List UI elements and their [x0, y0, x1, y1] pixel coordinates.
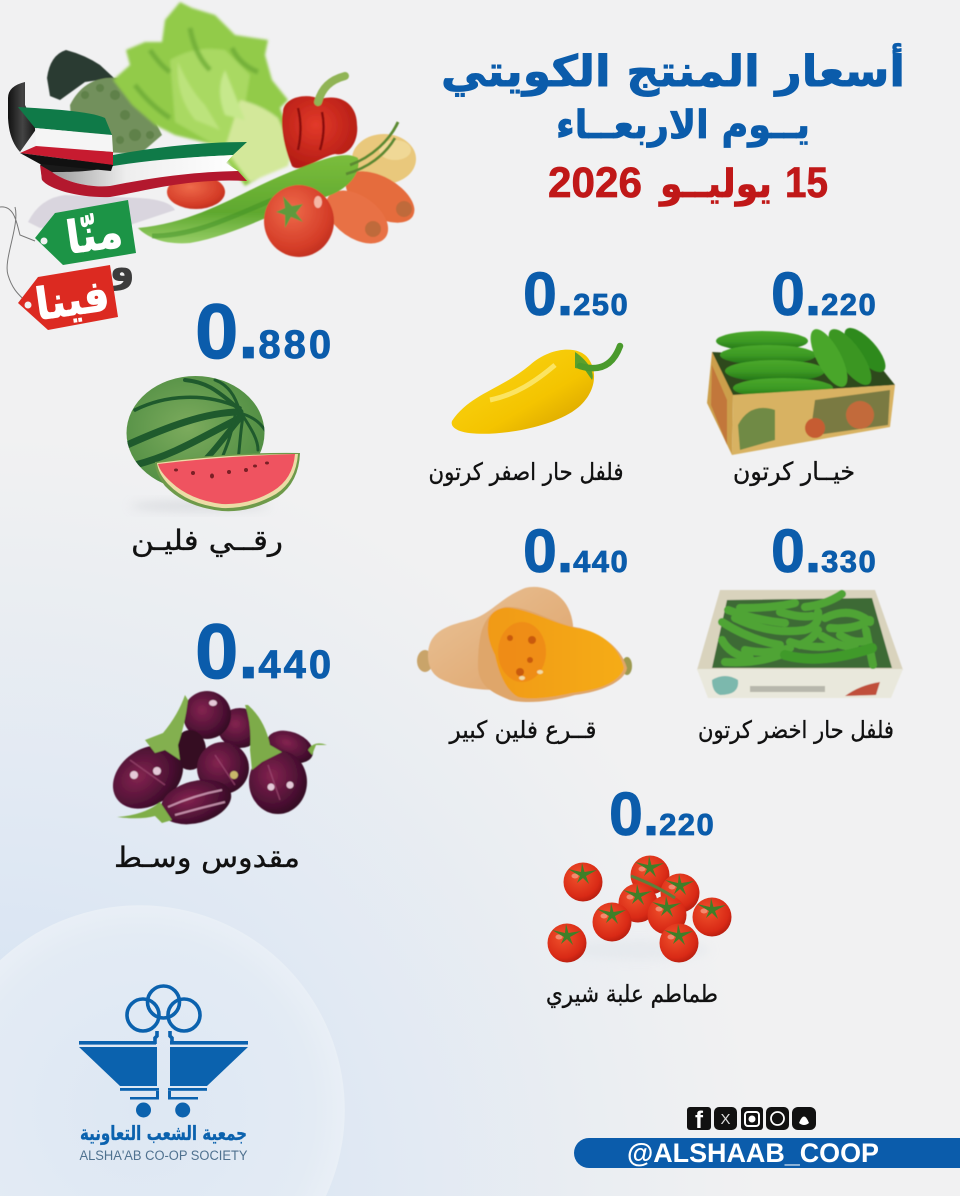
- icon: yellow pepper: [452, 346, 620, 434]
- connector: wa: و: [107, 242, 135, 292]
- long ribbon: [40, 142, 247, 197]
- icon: broccoli: [47, 50, 162, 154]
- icon: carrots: [316, 161, 423, 254]
- date: 15: [785, 159, 828, 207]
- icon: lettuce: [113, 2, 292, 186]
- logo english name: ALSHA'AB CO-OP SOCIETY: [80, 1148, 248, 1163]
- item: yellow hot pepper: [428, 260, 629, 486]
- price: 0.880: [195, 287, 334, 375]
- item: cherry tomatoes: [546, 780, 732, 1008]
- icon: white vegetable behind tags: [28, 195, 175, 228]
- social icons: [687, 1107, 816, 1134]
- price: 0.330: [771, 517, 877, 585]
- label: طماطم علبة شيري: [546, 980, 718, 1008]
- logo arabic name: جمعية الشعب التعاونية: [80, 1121, 247, 1145]
- icon: red pepper: [282, 76, 357, 168]
- handle bar: [574, 1138, 960, 1168]
- title block: [441, 43, 905, 207]
- icon: large tomato: [264, 185, 334, 257]
- price: 0.440: [195, 607, 334, 695]
- label: فلفل حار اخضر كرتون: [698, 716, 894, 744]
- item: green hot pepper carton: [697, 517, 903, 744]
- social icons: f: [695, 1107, 704, 1134]
- kuwait flag ribbon: [8, 82, 247, 197]
- item: watermelon: [126, 287, 334, 557]
- social icons: X: [720, 1111, 731, 1128]
- icon: cucumber box: [707, 322, 895, 455]
- label: خيــار كرتون: [733, 457, 855, 486]
- logo: alshaab co-op society: [79, 986, 248, 1163]
- handle text: @ALSHAAB_COOP: [627, 1138, 879, 1168]
- price: 0.220: [609, 780, 715, 848]
- icon: long green chili: [138, 122, 398, 243]
- price: 0.440: [523, 517, 629, 585]
- icon: small tomato: [167, 175, 225, 209]
- icon: eggplants: [101, 691, 327, 832]
- tags: mina w fina: [0, 200, 136, 331]
- icon: cherry tomatoes: [548, 856, 732, 962]
- icon: potato: [352, 134, 416, 184]
- hero vegetables illustration: [28, 2, 423, 257]
- subtitle: day: يــوم الاربعــاء: [556, 103, 810, 148]
- hoist and short flag: [8, 82, 113, 171]
- label: مقدوس وسـط: [114, 841, 300, 874]
- tag: green: منّا: [63, 204, 126, 265]
- icon: watermelon: [126, 376, 300, 511]
- label: قــرع فلين كبير: [449, 716, 596, 744]
- item: cucumber carton: [707, 260, 895, 486]
- icon: three rings and cart: [79, 986, 248, 1118]
- date: 2026: [548, 159, 642, 207]
- item: butternut squash: [417, 517, 632, 744]
- item: eggplants: [101, 607, 334, 874]
- icon: butternut: [417, 587, 632, 702]
- title: main heading: أسعار المنتج الكويتي: [441, 43, 905, 97]
- label: فلفل حار اصفر كرتون: [428, 458, 624, 486]
- tag: red: فينا: [32, 270, 113, 331]
- label: رقــي فليـن: [131, 524, 283, 557]
- date: يوليــو: [658, 162, 772, 207]
- price: 0.220: [771, 260, 877, 328]
- price: 0.250: [523, 260, 629, 328]
- icon: green pepper box: [697, 590, 903, 698]
- social media block: [574, 1107, 960, 1168]
- date: [548, 159, 828, 207]
